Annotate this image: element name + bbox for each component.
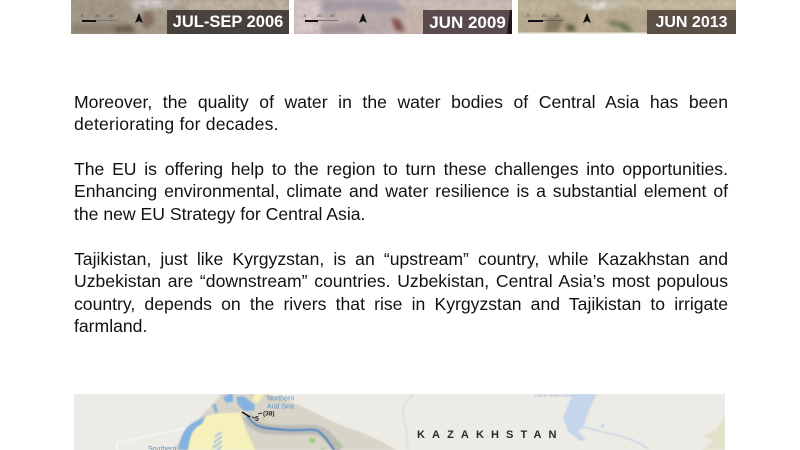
paragraph: EU help: The EU is offering help to the region to turn these challenges into opportunities.: [74, 159, 728, 179]
scale bar: 20: [95, 13, 100, 18]
eastern highland: [702, 415, 725, 450]
paragraph: water quality: Moreover, the quality of water in the water bodies of Central Asia has been: [74, 92, 728, 112]
basin area: [173, 394, 396, 450]
label: Northern Aral Sea: Northern: [267, 396, 294, 402]
scale bar: 40: [109, 13, 114, 18]
scale bar: [304, 13, 338, 22]
scale bar: [527, 13, 563, 22]
hatched zone: [212, 432, 222, 450]
paragraph: EU help: Enhancing environmental, climate and water resilience is a substantial element of: [74, 181, 728, 201]
satellite image: July to September 2006: JUL-SEP 2006: [173, 13, 283, 31]
paragraph: upstream and downstream countries: Uzbekistan are “downstream” countries. Uzbekistan, Central Asia’s most populous: [74, 271, 728, 291]
paragraph: upstream and downstream countries: Tajikistan, just like Kyrgyzstan, is an “upstream” country, while Kazakhstan and: [74, 249, 728, 269]
scale bar: 0: [304, 13, 307, 18]
north arrow: [583, 13, 591, 23]
map of the Aral Sea basin: [74, 394, 725, 450]
paragraph: EU help: [74, 159, 728, 224]
satellite image: June 2009: [294, 0, 512, 34]
paragraph: water quality: deteriorating for decades.: [74, 114, 279, 134]
inset pointer: [117, 428, 185, 450]
irrigated patches: [309, 437, 316, 444]
river corridor: [247, 416, 340, 450]
paragraph: upstream and downstream countries: farmland.: [74, 316, 147, 336]
satellite image: July to September 2006: [71, 0, 289, 34]
paragraph: upstream and downstream countries: country, depends on the rivers that rise in Kyrgyzstan and Tajikistan to irrigate: [74, 294, 728, 314]
scale bar: 20: [542, 13, 547, 18]
satellite image: June 2013: [518, 0, 736, 34]
paragraph: water quality: [74, 92, 728, 134]
western river: [403, 394, 413, 450]
north arrow: [135, 13, 143, 23]
label: dam depth (38): (38): [263, 410, 275, 418]
scale bar: 20: [317, 13, 322, 18]
paragraph: upstream and downstream countries: [74, 249, 728, 336]
map labels: [148, 393, 573, 450]
satellite image: June 2009: JUN 2009: [429, 13, 506, 32]
scale bar: [81, 13, 116, 22]
black image corner: [507, 10, 512, 34]
label: dam depth 5: 5: [255, 416, 259, 423]
dam markers: [242, 412, 262, 418]
scale bar: 40: [555, 13, 560, 18]
satellite image: June 2013: JUN 2013: [655, 14, 728, 31]
label: Aral Sea: Aral Sea: [267, 404, 294, 410]
Syr Darya river: [247, 415, 334, 450]
scale bar: 0: [527, 13, 530, 18]
paragraph: EU help: the new EU Strategy for Central Asia.: [74, 204, 365, 224]
north arrow: [359, 13, 367, 23]
scale bar: 40: [330, 13, 335, 18]
Lake Balkhash: [563, 394, 597, 441]
label: Kazakhstan: KAZAKHSTAN: [417, 429, 564, 441]
yellow desert: [188, 413, 255, 450]
scale bar: 0: [81, 13, 84, 18]
Southern Aral Sea: [178, 416, 206, 450]
Northern Aral Sea: [223, 394, 233, 403]
